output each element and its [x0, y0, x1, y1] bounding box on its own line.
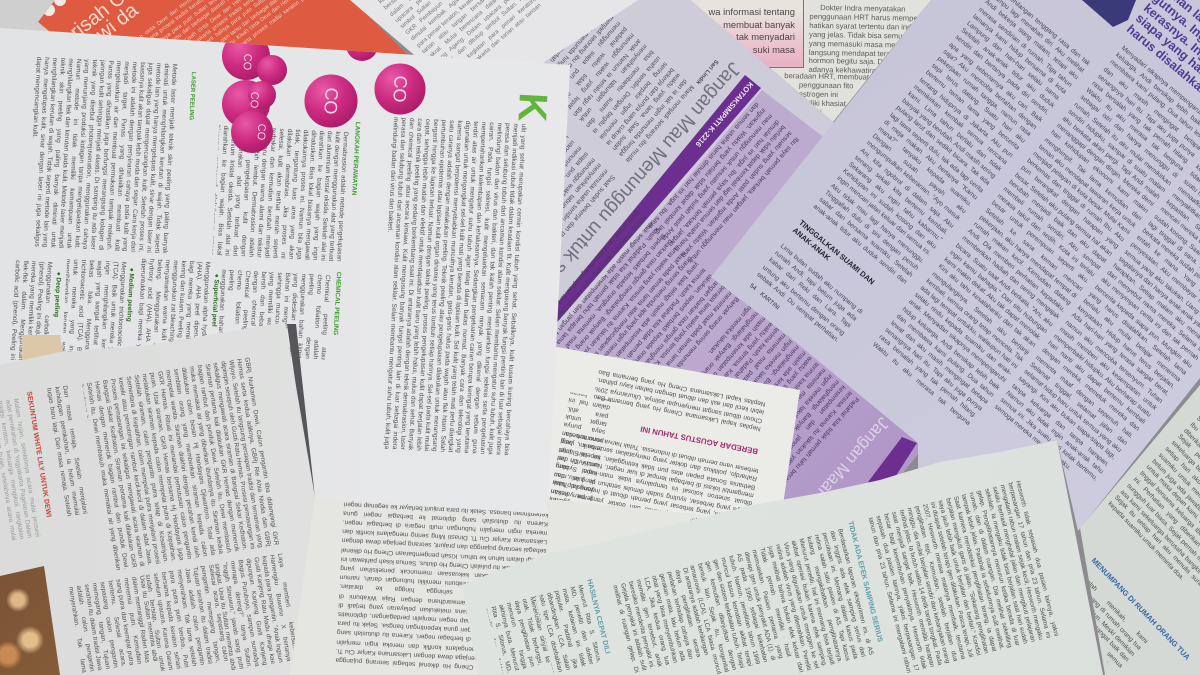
intro text: ulit yang sehat merupakan cermin kondisi tubuh yang sehat. Sebaliknya, kulit kusam kuning bercahaya bisa menjadi indikasi tubuh tidak dalam keadaan fit. Kulit mengusung banyak fungsi penting lain di luar sebagai indera perasa dan selubung tubuh dari ancaman kondisi alam sekitar. Selain membantu mengatur suhu tubuh, kulit juga melindungi badan dari virus dan bakteri, dan tak kalah penting menjalankan fungsi sekresi serta pengeluaran cairan. Pada fungsi sekresi, kulit mengeluarkan semacam minyak yang dikenal dengan sebum guna mempertahankan kelembapan dan kehalusannya. Sedangkan pengeluaran cairan berupa keringat yang terutama terdiri atas air untuk mengatur suhu tubuh agar tetap dalam batas normal. Banyak cara dan teknologi yang digunakan untuk mengangkat sel-sel kulit mati yang berada di lapisan kulit. Sel kulit yang telah mati perlu diangkat karena sangat berpotensi menyebabkan munculnya kerutan, garis-garis halus pada wajah atau flek hitam. Salah satu caranya adalah dengan melakukan peeling. Teknik peeling atau pengelupasan dilakukan untuk merangsang pertumbuhan epidermis atau lapisan kulit organ dinamis yang terus tumbuh setiap harinya. Sel-sel pada kulit mulai berganti hingga ke lapisan terluar. Namun dengan teknik peeling, proses pengelupasan kulit dapat berjalan lebih cepat, sehingga lebih mudah dan efektif untuk mendapatkan kulit baru yang lebih halus, mulus dan sehat. Banyak cara dan teknik peeling yang sedang berkembang saat ini. Di antaranya adalah dengan teknik dermabrasion, laser dan chemical peeling atau secara kimiawi. Kulit mengusung banyak fungsi penting lain di luar sebagai indera perasa dan selubung tubuh dari ancaman kondisi alam sekitar. Selain membantu mengatur suhu tubuh, kulit juga melindungi badan dari virus dan bakteri. [383, 117, 527, 456]
HRT lower text: beradaan HRT, membuat [784, 71, 869, 82]
heading: medium peeling: ● Medium peeling [125, 268, 135, 322]
pink callout box: suki masa [753, 44, 795, 55]
magenta heading: BEREDAR AGUSTUS TAHUN INI [640, 424, 759, 456]
HRT article text: adanya kekhawatiran [808, 65, 880, 75]
HRT article text: hatikan syarat tertentu dan indikasi [809, 21, 927, 32]
red heading: SEKUNTUM WHITE LILY UNTUK DEWI [25, 391, 52, 518]
page: far right article [1080, 385, 1200, 675]
heading: laser peeling: LASER PEELING [187, 72, 196, 120]
page: purple column article [543, 0, 918, 500]
heading: superficial peel: ● Superficial peel [210, 274, 220, 327]
red page subtitle: wi da [92, 0, 142, 45]
HRT lower text: penggunaan fito [799, 80, 853, 90]
molecule bubbles [222, 42, 426, 153]
page: bottom right article [462, 440, 1103, 675]
second upper column text: Saat sudah bekerja dan punya uang cukup ia sering berpikir ingin memulai usaha sendiri. Dengan begitu ia bisa membantu suami dan menyisihkan tabungan untuk anak. Namun ia selalu ragu dan menunggu waktu yang tepat, padahal waktu tidak akan menunggu siapa pun. Maria menjadi seorang ibu muda dan ia tak ingin menunda hingga waktu yang lama. Saat sudah bekerja dan punya uang cukup ia sering berpikir ingin memulai usaha sendiri. Dengan begitu ia bisa membantu suami. Namun ia selalu ragu dan menunggu waktu yang tepat, padahal waktu tidak akan menunggu siapa pun. Maria menjadi seorang ibu muda dan ia tak ingin menunda hingga waktu yang lama. [420, 119, 616, 329]
heading: chemical peeling: CHEMICAL PEELING [332, 272, 342, 335]
page: Beredar Agustus article [548, 346, 800, 523]
page: HRT article [690, 0, 931, 122]
molecule bubbles: CO [389, 75, 411, 103]
pink callout box: membuat banyak [723, 19, 795, 30]
page: White Lily article [0, 322, 315, 675]
HRT article text: hormon begitu saja. Dan [809, 56, 891, 67]
lilac panel text three: Padahal kita tidak pernah tahu berapa lama waktu yang tersisa. Karena itu lakukan yang baik selagi masih ada kesempatan dan jangan biarkan rasa gengsi menghalangi. Banyak orang sering menunda apa yang ingin mereka lakukan, seperti berbakti kepada orangtua, meminta maaf pada teman lama atau mengucapkan terima kasih. Padahal kita tidak pernah tahu berapa lama waktu yang tersisa. Karena itu lakukan yang baik selagi masih ada kesempatan dan jangan biarkan rasa gengsi menghalangi. Banyak orang sering menunda apa yang ingin mereka lakukan, seperti berbakti kepada orangtua, meminta maaf pada teman lama atau mengucapkan terima kasih. Padahal kita tidak pernah tahu berapa lama waktu yang tersisa. Karena itu lakukan yang baik selagi masih ada kesempatan dan jangan biarkan rasa gengsi menghalangi. Banyak orang sering menunda apa yang ingin mereka lakukan. [644, 303, 860, 528]
page: large lavender article [711, 0, 1200, 531]
blue heading: MENUMPANG DI RUMAH ORANG TUA [1090, 556, 1192, 662]
purple strip [557, 75, 761, 322]
lilac panel text two: Banyak orang sering menunda apa yang ingin mereka lakukan, seperti berbakti kepada orangtua, meminta maaf pada teman lama atau mengucapkan terima kasih. Padahal kita tidak pernah tahu berapa lama waktu yang tersisa. Karena itu lakukan yang baik selagi masih ada kesempatan dan jangan biarkan rasa gengsi menghalangi. Banyak orang sering menunda apa yang ingin mereka lakukan, seperti berbakti kepada orangtua, meminta maaf pada teman lama atau mengucapkan terima kasih. Padahal kita tidak pernah tahu berapa lama waktu yang tersisa. Karena itu lakukan yang baik selagi masih ada kesempatan dan jangan biarkan rasa gengsi menghalangi. Banyak orang sering menunda apa yang ingin mereka lakukan, seperti berbakti kepada orangtua, meminta maaf pada teman lama atau mengucapkan terima kasih. Padahal kita tidak pernah tahu berapa lama waktu yang tersisa. Karena itu lakukan yang baik selagi masih ada kesempatan dan jangan biarkan rasa gengsi menghalangi. Banyak orang sering menunda apa yang ingin mereka lakukan, seperti berbakti kepada orangtua, meminta maaf pada teman lama atau mengucapkan terima kasih. Padahal kita tidak pernah tahu berapa lama waktu yang tersisa. Karena itu lakukan yang baik selagi masih ada kesempatan dan jangan biarkan rasa gengsi menghalangi. Banyak orang sering menunda apa yang ingin mereka lakukan, seperti berbakti kepada orangtua, meminta maaf pada teman lama atau mengucapkan terima kasih. [452, 209, 740, 519]
molecule bubbles: CO [255, 123, 267, 141]
page: skin care article [0, 28, 570, 514]
molecule bubbles: CO [248, 91, 260, 109]
drop cap K: K [510, 92, 555, 123]
strip label: KOTAKSIMPATI K-2216 [694, 80, 755, 149]
intro text above heading: Nepilas kapal Laksamana Cheng Ho yang bernama Bao Choon dibuat sangat menyerupai aslinya. Ukurannya 20% lebih kecil dari asli dan dibuat dengan bahan kayu pilihan. Nepilas kapal Laksamana Cheng Ho yang bernama Bao Choon dibuat sangat menyerupai aslinya. [593, 368, 766, 432]
pink callout box: wa informasi tentang [708, 6, 795, 17]
lilac lower panel [556, 90, 918, 500]
teal heading: TIDAK ADA EFEK SAMPING SERIUS [846, 520, 885, 643]
lower lilac heading: Jangan Maaf Pada [785, 414, 893, 534]
HRT article text [808, 4, 917, 74]
heading: langkah perawatan: LANGKAH PERAWATAN [350, 122, 361, 196]
pink callout box: tak menyadari [736, 31, 795, 42]
page: top-left grey corner [0, 0, 60, 40]
pink callout box [700, 0, 804, 68]
HRT lower text: estrogen ini [799, 89, 838, 99]
lower purple bar end [868, 437, 917, 482]
HRT lower text: miliki khasiat [803, 98, 846, 108]
red page corner dots [44, 0, 66, 16]
section heading: TINGGALKAN SUAMI DAN [797, 218, 876, 286]
HRT article text: Dokter Indra menyatakan [820, 3, 905, 14]
body text below heading: Nurul Arifin dan Bethania Sonata papan atas pun tidak ketinggalan, seperti Slamet Rahardjo, politikus dan dokter yang menyatakan serumon ini, yang terbesar yang pernah dibuat di Indonesia. Tidak hanya yang terbesar, syuting sudah dimulai setahun yang lalu, dan dibuat sinetron kolosal ini tampaknya tidak main-main. Syuting mengambil lokasi di berbagai tempat di luar negeri. Nurul Arifin dan Bethania Sonata papan atas pun tidak ketinggalan, seperti Slamet Rahardjo, politikus dan dokter yang menyatakan serumon ini, yang terbesar yang pernah dibuat di Indonesia. Tidak hanya yang terbesar, syuting sudah dimulai setahun yang lalu. [549, 431, 759, 540]
HRT article text: penggunaan HRT harus mempertimbangkan [809, 12, 959, 23]
molecule bubbles: CO [241, 53, 253, 71]
molecule bubbles: CO [320, 87, 342, 115]
laser peeling column: Metode laser menjadi teknik skin peeling yang paling banyak diminati untuk menghilangkan kerutan di wajah. Tidak seperti metode lain yang hanya mengelupas kulit, sinar dengan laser ini juga sekaligus dapat mengencangkan kulit. Setelah proses ini, biasanya kulit akan tampak lebih muda dan segar. Cara kerja dari metode ini adalah dengan penyinaran cahaya pada kulit yang menjadi target. Panas yang dihasilkan membuat kulit mengeluarkan air dan membuat permukaan tampak melepuh. Panas yang dihasilkan juga berfungsi merangsang kolagen di jaringan kulit sehingga menjadi elastis. Di samping itu ada laser teknik yang disebut photorejuvenation, menggunakan cahaya yang menunjang produksi kolagen tanpa mengelupaskan kulit. Namun metode ini tidak memiliki kemampuan untuk menghilangkan flek dan kerutan pada kulit. Metode laser menjadi teknik skin peeling yang paling banyak diminati untuk menghilangkan kerutan di wajah. Tidak seperti metode lain yang hanya mengelupas kulit, sinar dengan laser ini juga sekaligus dapat mengencangkan kulit. [31, 57, 178, 254]
article heading: Jangan Mau Menunggu untuk sesuatu [511, 58, 745, 322]
fold shadow [287, 324, 315, 498]
teal heading two: HASILNYA CEPAT DILI [585, 578, 613, 655]
dark photo corner [1082, 0, 1136, 27]
HRT article text: langsung mendapat terapi [809, 47, 897, 58]
HRT lower text [784, 72, 869, 112]
page: red article [38, 0, 408, 54]
HRT article text: yang memasuki masa menopause [809, 38, 925, 50]
heading: deep peeling: ● Deep peeling [53, 272, 62, 317]
HRT lower text: erti [811, 107, 822, 116]
HRT article text: yang jelas. Tidak bisa semua wanita [809, 30, 931, 41]
author credit: Sari Lindik [694, 58, 719, 85]
section heading: ANAK-ANAK [791, 225, 832, 262]
page folio: 54 KARTINI [748, 283, 780, 311]
body text column one: GBRj Nurkamen Dewi, Calon pengantin tiba didampingi GKR Hemas serta kedua adiknya, GBRj Rie Ahia Nindia dan GBRj Wijoyo. Setelah itu langsung persiapan tradisi dan ternaman yang dipimpin sesepuh oleh Gusti Ratu Hemas. Prosesi pemasangan ini sekaligus mengawali acara siraman di Bangsal Sekar Kedhaton. Siraman pertama kali dilakukan GKR Hemas dengan memercik bagian rambut dan punduk Dewi. Setelah itu, Dewi membasuh muka memakai air yang diberikan ibundanya itu. Siraman kedua dilakukan calon besan Hj Handayani Djiwantoro. Total ada sembilan orang yang memberikan siraman kepada calon mempelai wanita. Siraman diakhiri dengan pecahan kendi oleh GKR Hemas. Ritual ini menandai pemutusan calon pengantin puan. Usai siraman, GKR Hemas bersama Hj Handayani juga melakukan siraman kepada calon mempelai putra di Kepatihan. Setelah siraman, calon pengantin putra tetap di Kesatriyan. Sementara di Kepatihan, calon mempelai putra menjalani prosesi keselir atau pemotongan rambut kecil-kecil di dalam adat Jawa. Prosesi pemasangan ini sekaligus mengawali acara siraman di Bangsal Sekar Kedhaton. Siraman pertama kali dilakukan GKR Hemas dengan memercik bagian rambut dan punduk Dewi. Setelah itu, Dewi membasuh muka memakai air yang diberikan ibundanya itu. [82, 357, 280, 571]
